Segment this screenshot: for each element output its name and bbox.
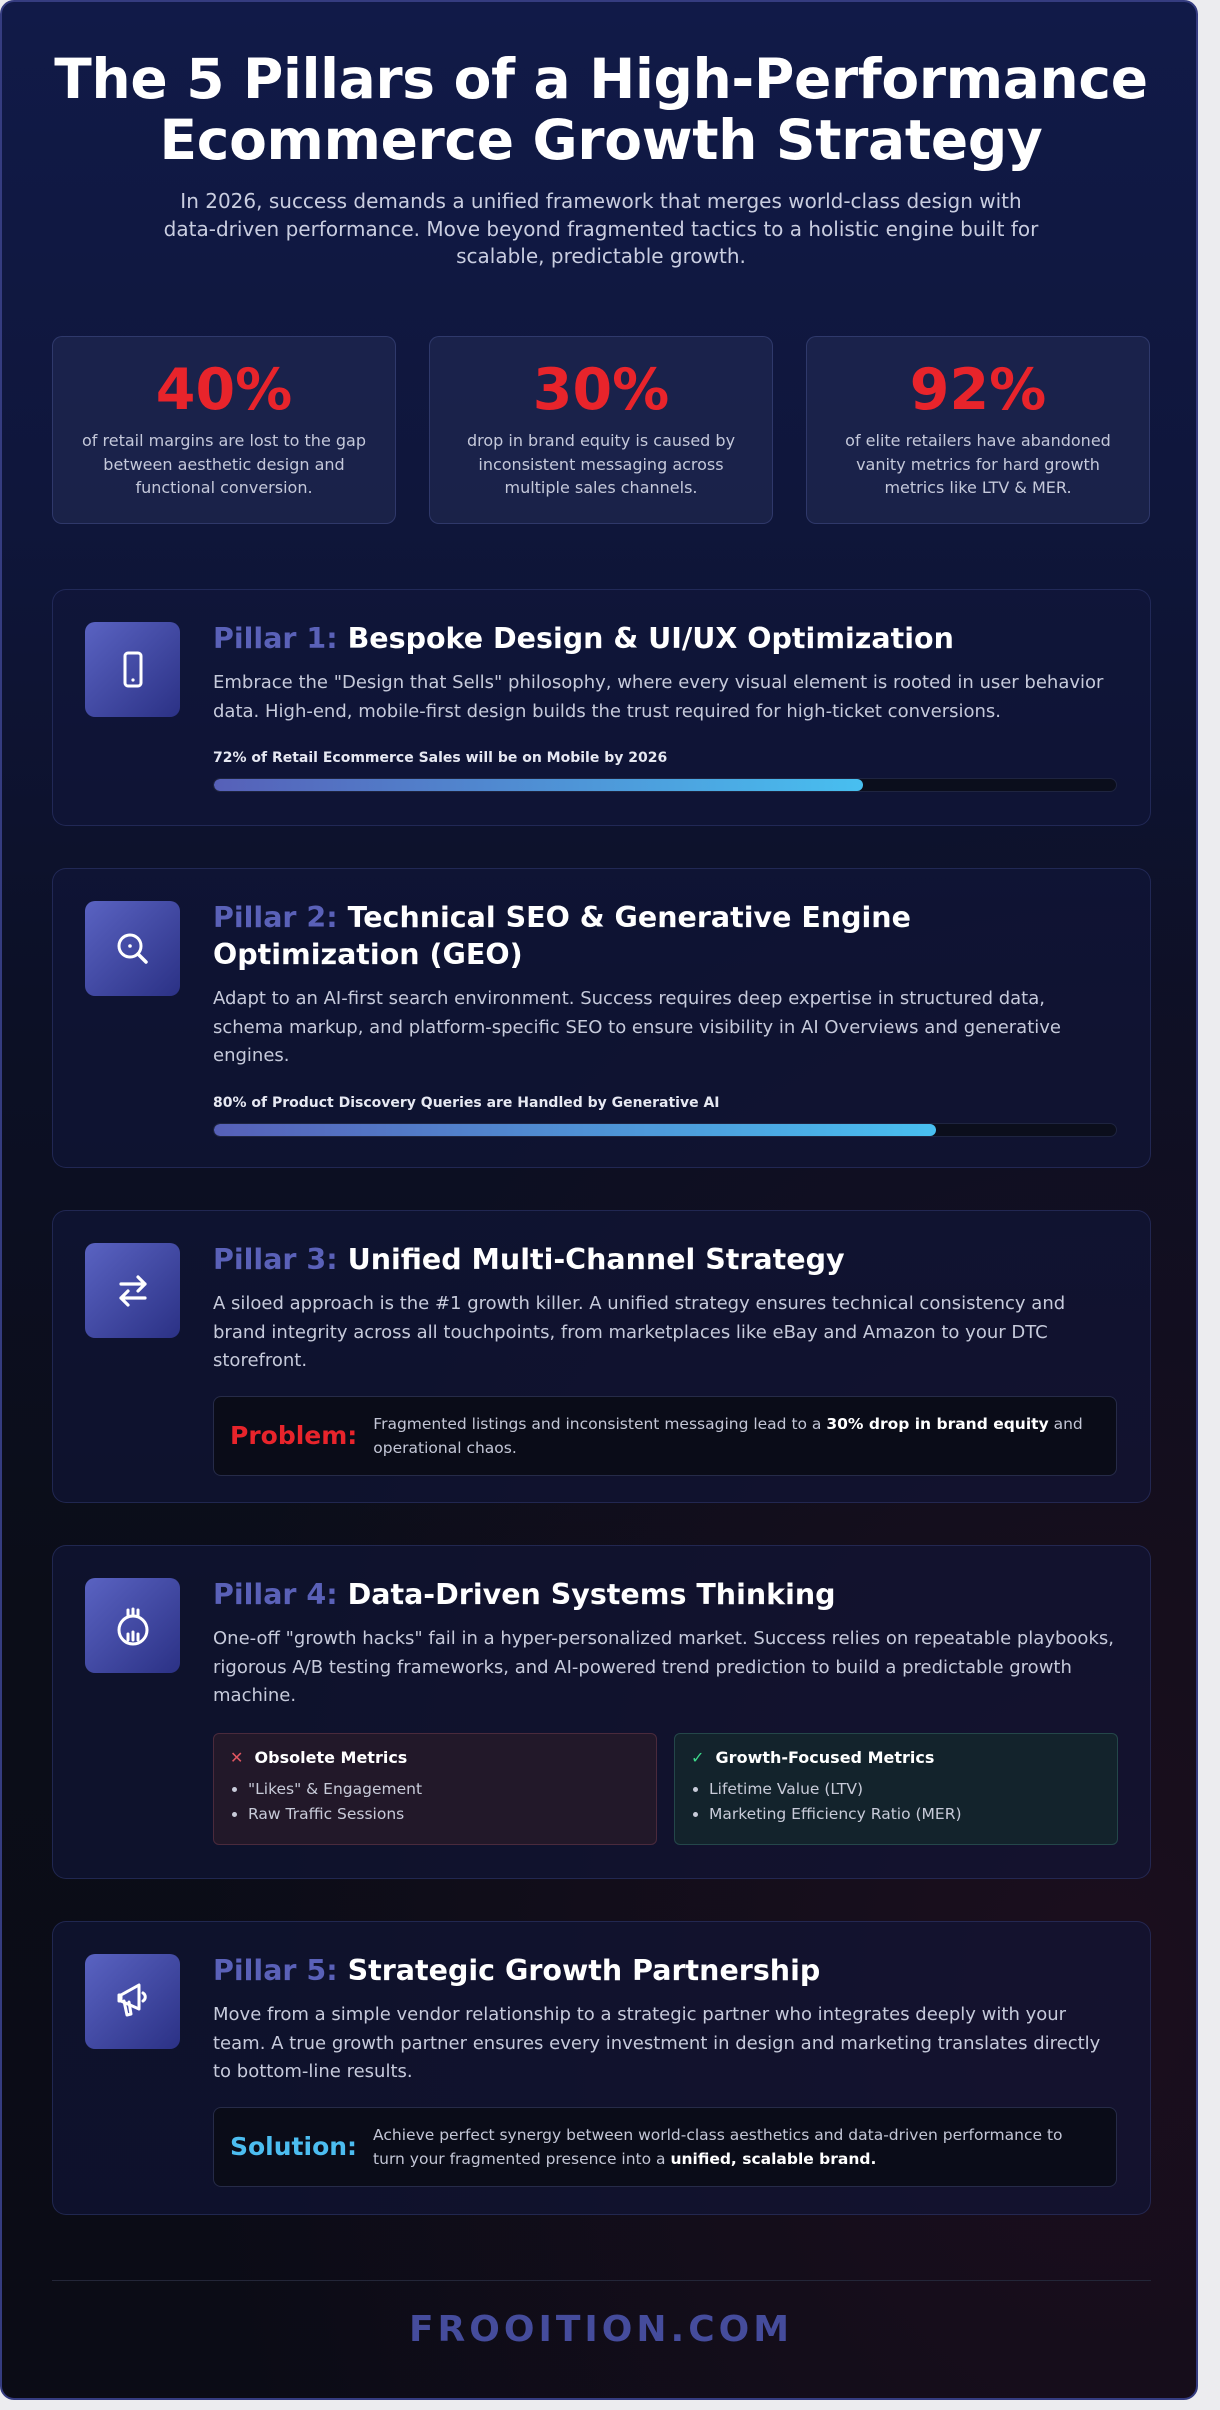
panel: pillar 1: Embrace the "Design that Sells" philosophy, where every visual element is rooted in user behavior data. High-end, mobile-first design builds the trust required for high-ticket conversions.: [213, 672, 1103, 722]
icon: megaphone: [85, 1954, 180, 2049]
panel: pillar 3: [52, 1210, 1151, 1503]
panel: pillar 1: [52, 589, 1151, 826]
stat card: 40%: 40%: [156, 357, 292, 423]
panel: pillar 4: One-off "growth hacks" fail in a hyper-personalized market. Success relies on repeatable playbooks, rigorous A/B testing frameworks, and AI-powered trend prediction to build a predictable growth machine.: [213, 1628, 1114, 1706]
panel: pillar 2: Adapt to an AI-first search environment. Success requires deep expertise in structured data, schema markup, and platform-specific SEO to ensure visibility in AI Overviews and generative engines.: [213, 988, 1061, 1066]
panel: growth-focused metrics: ✓ Growth-Focused Metrics: [691, 1748, 934, 1766]
panel: pillar 5: Pillar 5: Strategic Growth Partnership: [213, 1954, 820, 1987]
icon: arrows: [85, 1243, 180, 1338]
stat card: 40%: of retail margins are lost to the gap between aesthetic design and functional conversion.: [82, 431, 366, 497]
stat card: 30%: [429, 336, 773, 524]
callout: problem: Fragmented listings and inconsistent messaging lead to a 30% drop in brand equity and operational chaos.: [373, 1414, 1083, 1456]
panel: pillar 2: [52, 868, 1151, 1168]
panel: pillar 2: Pillar 2: Technical SEO & Generative Engine Optimization (GEO): [213, 901, 911, 971]
stat card: 92%: of elite retailers have abandoned vanity metrics for hard growth metrics like LTV & MER.: [845, 431, 1111, 497]
bar chart: 72%: [213, 778, 1117, 792]
panel: growth-focused metrics: Marketing Efficiency Ratio (MER): [709, 1804, 962, 1822]
panel: pillar 3: A siloed approach is the #1 growth killer. A unified strategy ensures technical consistency and brand integrity across all touchpoints, from marketplaces like eBay and Amazon to your DTC storefront.: [213, 1293, 1065, 1371]
title: The 5 Pillars of a High-Performance: [54, 47, 1148, 111]
stat card: 30%: 30%: [533, 357, 669, 423]
panel: obsolete metrics: ✕ Obsolete Metrics: [230, 1748, 407, 1766]
callout: problem: Problem:: [230, 1421, 357, 1450]
panel: pillar 1: Pillar 1: Bespoke Design & UI/UX Optimization: [213, 622, 954, 655]
panel: pillar 5: Move from a simple vendor relationship to a strategic partner who integrates deeply with your team. A true growth partner ensures every investment in design and marketing translates directly to bottom-line results.: [213, 2004, 1100, 2082]
panel: obsolete metrics: [213, 1732, 657, 1844]
icon: search: [85, 901, 180, 996]
panel: pillar 2: 80% of Product Discovery Queries are Handled by Generative AI: [213, 1094, 719, 1110]
title: [54, 47, 1148, 172]
panel: pillar 4: Pillar 4: Data-Driven Systems Thinking: [213, 1578, 836, 1611]
icon: mobile phone: [85, 622, 180, 717]
stat card: 40%: [52, 336, 396, 524]
footer brand: FROOITION.COM: [409, 2309, 793, 2350]
stat card: 92%: 92%: [910, 357, 1046, 423]
callout: problem: [213, 1396, 1117, 1476]
subtitle: In 2026, success demands a unified framework that merges world-class design with data-driven performance. Move beyond fragmented tactics to a holistic engine built for scalable, predictable growth.: [164, 189, 1038, 268]
panel: growth-focused metrics: [674, 1732, 1118, 1844]
callout: solution: Solution:: [230, 2132, 357, 2161]
stat card: 92%: [806, 336, 1150, 524]
panel: pillar 3: Pillar 3: Unified Multi-Channel Strategy: [213, 1243, 845, 1276]
panel: pillar 5: [52, 1921, 1151, 2215]
panel: pillar 4: [52, 1545, 1151, 1879]
panel: obsolete metrics: "Likes" & Engagement: [248, 1780, 422, 1798]
callout: solution: Achieve perfect synergy between world-class aesthetics and data-driven performance to turn your fragmented presence into a unified, scalable brand.: [373, 2126, 1063, 2168]
stat card: 30%: drop in brand equity is caused by inconsistent messaging across multiple sales channels.: [467, 431, 735, 497]
panel: obsolete metrics: Raw Traffic Sessions: [248, 1804, 404, 1822]
panel: growth-focused metrics: Lifetime Value (LTV): [709, 1780, 863, 1798]
panel: pillar 1: 72% of Retail Ecommerce Sales will be on Mobile by 2026: [213, 750, 667, 766]
callout: solution: [213, 2106, 1117, 2186]
bar chart: 80%: [213, 1122, 1117, 1136]
title: Ecommerce Growth Strategy: [160, 108, 1042, 172]
icon: brain/systems: [85, 1578, 180, 1673]
